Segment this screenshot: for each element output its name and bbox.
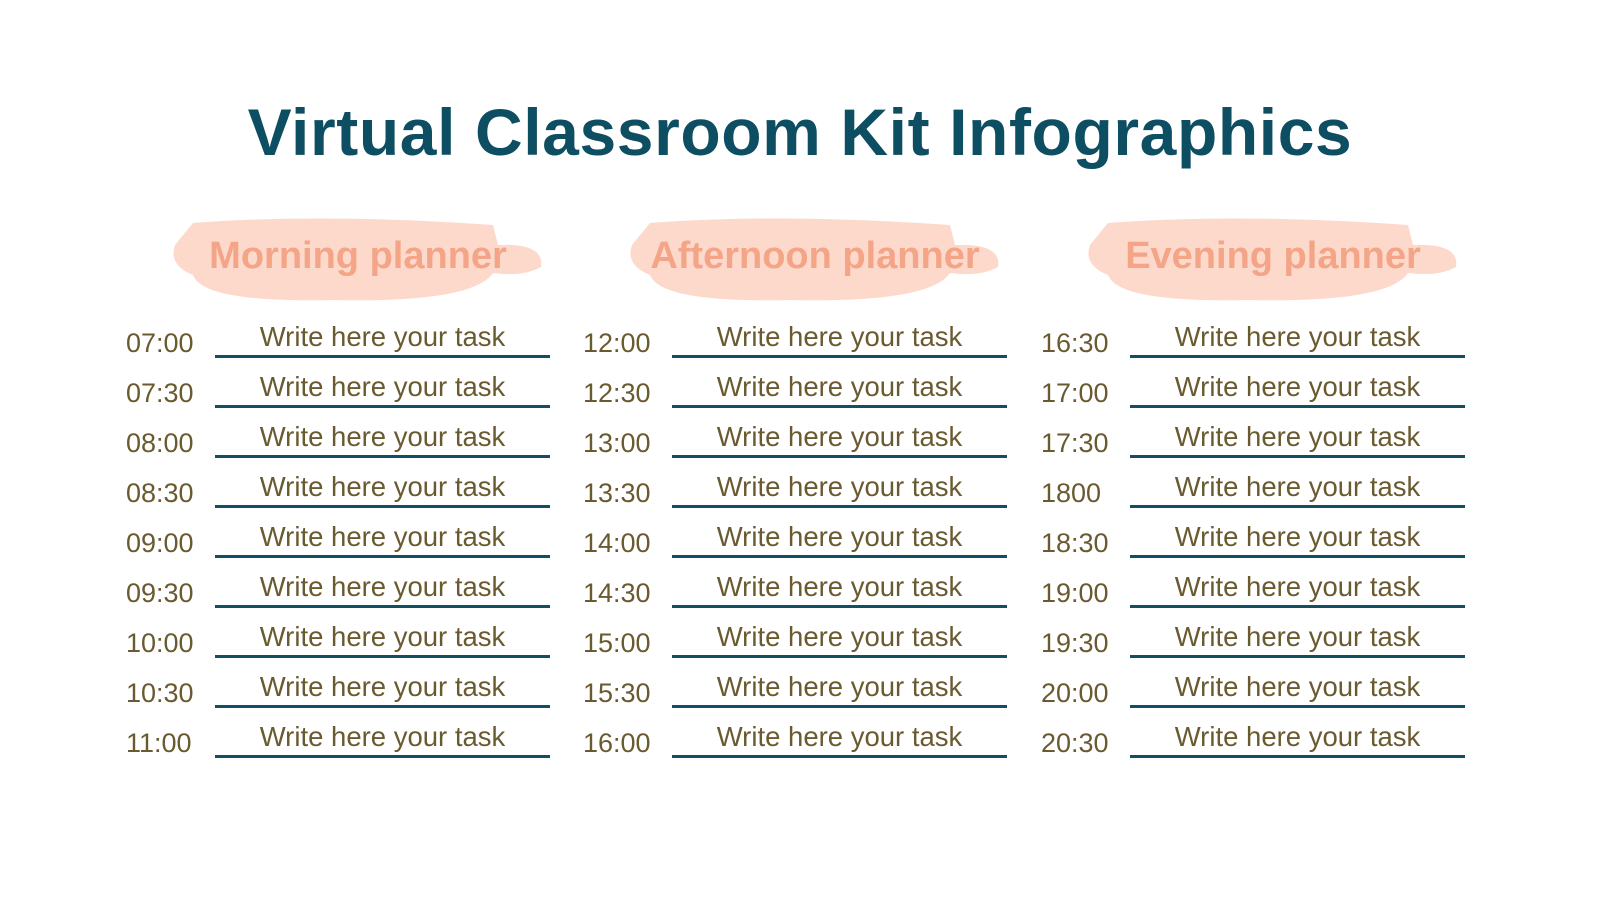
panel: afternoon planner: Write here your task xyxy=(717,321,962,352)
panel: afternoon planner: Write here your task xyxy=(717,521,962,552)
panel: evening planner: 20:30 xyxy=(1041,728,1109,758)
panel: evening planner: Write here your task xyxy=(1175,721,1420,752)
panel: morning planner: 11:00 xyxy=(126,728,192,758)
panel: afternoon planner: 15:30 xyxy=(583,678,651,708)
panel: afternoon planner: 12:00 xyxy=(583,328,651,358)
panel: afternoon planner: Write here your task xyxy=(717,371,962,402)
panel: morning planner: 09:00 xyxy=(126,528,194,558)
panel: afternoon planner: Write here your task xyxy=(717,621,962,652)
panel: afternoon planner: 13:30 xyxy=(583,478,651,508)
heading: evening planner: Evening planner xyxy=(1125,235,1421,277)
panel: morning planner: Write here your task xyxy=(260,571,505,602)
title: Virtual Classroom Kit Infographics xyxy=(248,95,1352,169)
panel: evening planner: 20:00 xyxy=(1041,678,1109,708)
panel: morning planner: 10:30 xyxy=(126,678,194,708)
heading: morning planner: Morning planner xyxy=(209,235,507,277)
panel: morning planner: Write here your task xyxy=(260,371,505,402)
panel: evening planner: Write here your task xyxy=(1175,421,1420,452)
panel: afternoon planner: Write here your task xyxy=(717,671,962,702)
panel: afternoon planner: 16:00 xyxy=(583,728,651,758)
panel: evening planner: 19:00 xyxy=(1041,578,1109,608)
heading: morning planner xyxy=(174,218,542,300)
panel: morning planner xyxy=(126,218,550,758)
panel: morning planner: Write here your task xyxy=(260,521,505,552)
panel: afternoon planner: 13:00 xyxy=(583,428,651,458)
panel: morning planner: 10:00 xyxy=(126,628,194,658)
heading: afternoon planner xyxy=(630,218,998,300)
panel: evening planner: Write here your task xyxy=(1175,571,1420,602)
panel: morning planner: Write here your task xyxy=(260,621,505,652)
panel: evening planner: 19:30 xyxy=(1041,628,1109,658)
panel: evening planner: Write here your task xyxy=(1175,621,1420,652)
panel: morning planner: 08:00 xyxy=(126,428,194,458)
panel: morning planner: 07:30 xyxy=(126,378,194,408)
panel: evening planner: 16:30 xyxy=(1041,328,1109,358)
panel: morning planner: 07:00 xyxy=(126,328,194,358)
panel: afternoon planner xyxy=(583,218,1007,758)
panel: morning planner: Write here your task xyxy=(260,321,505,352)
panel: evening planner: 17:00 xyxy=(1041,378,1109,408)
panel: afternoon planner: 15:00 xyxy=(583,628,651,658)
panel: afternoon planner: Write here your task xyxy=(717,421,962,452)
panel: afternoon planner: Write here your task xyxy=(717,471,962,502)
panel: afternoon planner: Write here your task xyxy=(717,721,962,752)
panel: evening planner xyxy=(1041,218,1465,758)
panel: morning planner: Write here your task xyxy=(260,421,505,452)
panel: evening planner: 18:30 xyxy=(1041,528,1109,558)
panel: evening planner: 1800 xyxy=(1041,478,1101,508)
panel: evening planner: 17:30 xyxy=(1041,428,1109,458)
panel: morning planner: Write here your task xyxy=(260,471,505,502)
heading: afternoon planner: Afternoon planner xyxy=(650,235,980,277)
panel: evening planner: Write here your task xyxy=(1175,521,1420,552)
panel: afternoon planner: 12:30 xyxy=(583,378,651,408)
panel: morning planner: Write here your task xyxy=(260,721,505,752)
panel: morning planner: 09:30 xyxy=(126,578,194,608)
panel: afternoon planner: 14:00 xyxy=(583,528,651,558)
heading: evening planner xyxy=(1088,218,1456,300)
panel: evening planner: Write here your task xyxy=(1175,471,1420,502)
panel: evening planner: Write here your task xyxy=(1175,321,1420,352)
panel: morning planner: Write here your task xyxy=(260,671,505,702)
panel: afternoon planner: Write here your task xyxy=(717,571,962,602)
panel: morning planner: 08:30 xyxy=(126,478,194,508)
panel: evening planner: Write here your task xyxy=(1175,371,1420,402)
panel: afternoon planner: 14:30 xyxy=(583,578,651,608)
panel: evening planner: Write here your task xyxy=(1175,671,1420,702)
